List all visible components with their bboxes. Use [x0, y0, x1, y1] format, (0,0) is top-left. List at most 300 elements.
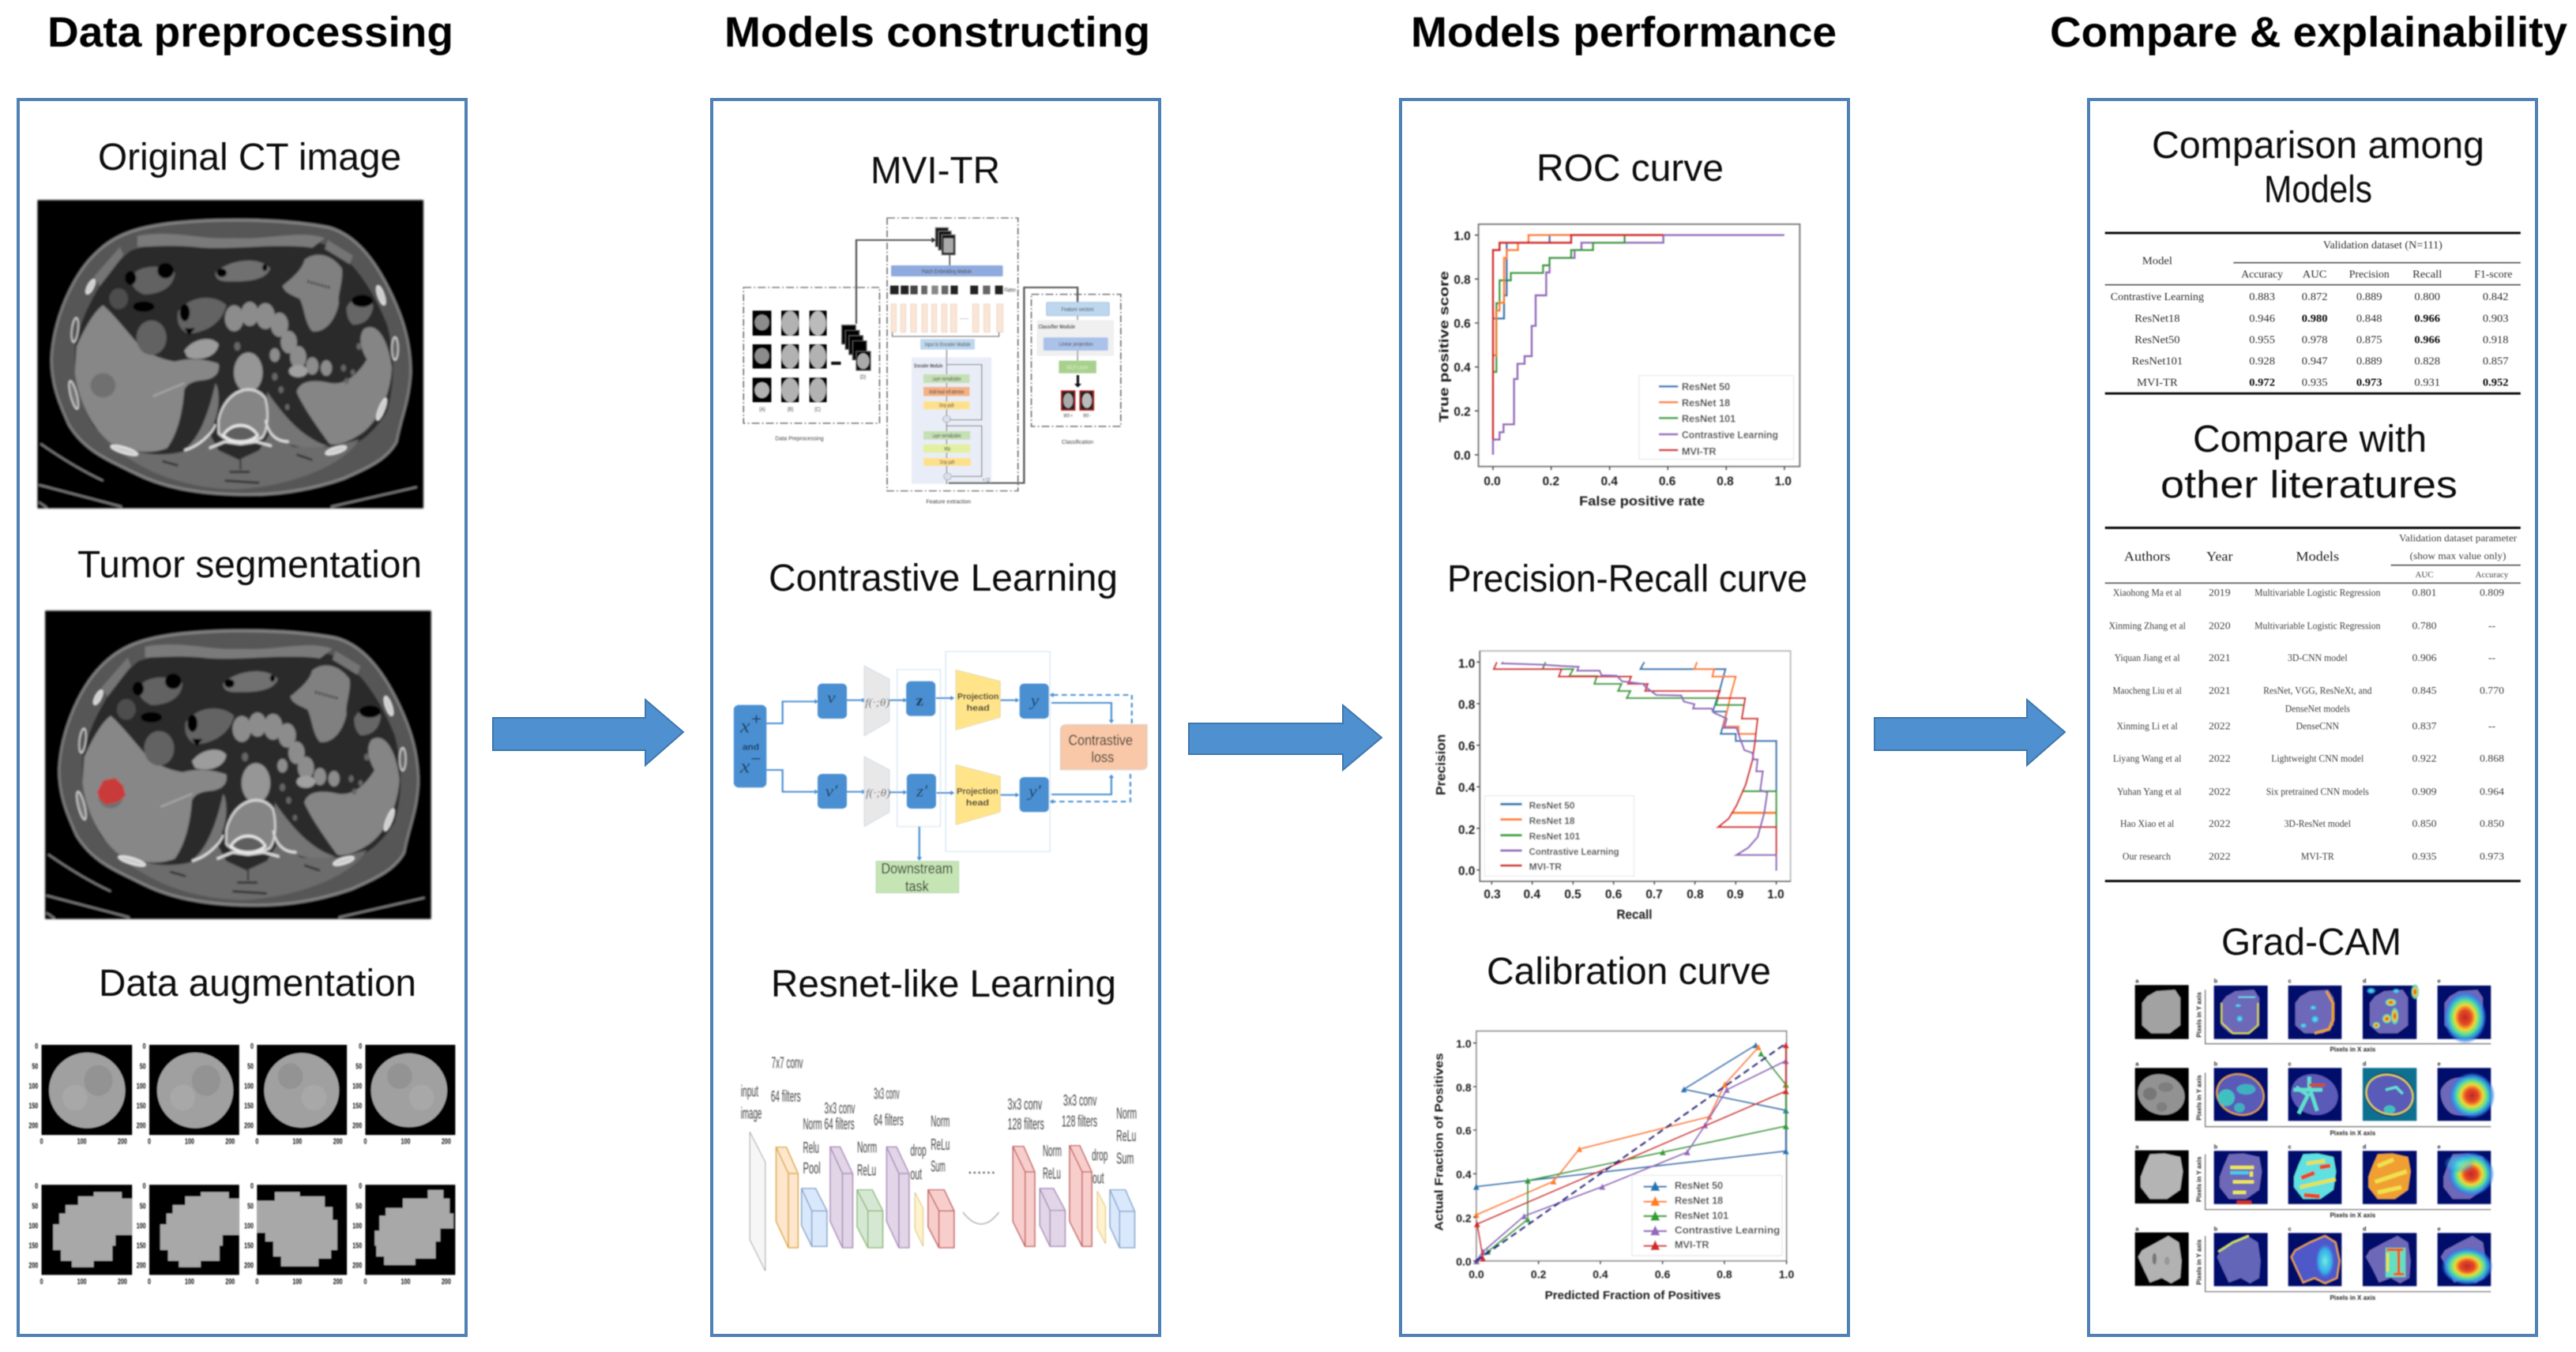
subheading: comparison among models: Models: [2264, 169, 2372, 211]
table: comparison with literature: (show max value only): [2410, 550, 2506, 561]
image grid: augmented tumor crops: 200: [28, 1121, 38, 1130]
image grid: augmented tumor crops: 200: [352, 1261, 362, 1270]
table: comparison with literature: Multivariable Logistic Regression: [2254, 620, 2381, 631]
table: comparison with literature: Multivariable Logistic Regression: [2254, 587, 2381, 599]
tile letters: c: [2288, 1061, 2292, 1068]
chart: calibration curve: Actual Fraction of Positives: [1434, 1053, 1446, 1231]
diagram: resnet-like network: 64 filters: [771, 1088, 801, 1106]
image grid: augmented tumor crops: 200: [28, 1261, 38, 1270]
table: comparison with literature: DenseNet models: [2285, 703, 2350, 714]
axes and axis labels: Pixels in X axis: [2330, 1294, 2376, 1301]
chart: ROC curve: 0.4: [1601, 475, 1618, 489]
diagram: contrastive learning: Projection: [957, 691, 998, 701]
chart: ROC curve: MVI-TR: [1682, 446, 1717, 457]
table: comparison among models: 0.978: [2302, 335, 2328, 346]
table: comparison among models: Validation dataset (N=111): [2323, 240, 2442, 251]
table: comparison with literature: 0.801: [2412, 587, 2437, 599]
chart: precision-recall curve: ResNet 101: [1529, 831, 1581, 842]
diagram: MVI-TR architecture: (B): [788, 406, 794, 412]
arrow: performance to comparison: [1875, 700, 2065, 765]
table: comparison with literature: 0.845: [2412, 685, 2437, 697]
image: original CT scan: [37, 200, 423, 509]
table: comparison with literature: 0.780: [2412, 620, 2437, 631]
chart: ROC curve: ResNet 101: [1682, 414, 1736, 425]
diagram: contrastive learning: z: [916, 691, 923, 709]
table: comparison with literature: ResNet, VGG, ResNeXt, and: [2263, 685, 2372, 697]
heading: data preprocessing: Data preprocessing: [47, 9, 453, 56]
chart: calibration curve: 0.2: [1531, 1268, 1547, 1280]
table: comparison among models: 0.980: [2302, 314, 2328, 325]
chart: calibration curve: ResNet 50: [1675, 1181, 1723, 1192]
diagram: resnet-like network: drop: [1092, 1147, 1107, 1164]
tile letters: d: [2363, 1225, 2366, 1232]
image grid: augmented tumor crops: 0: [148, 1277, 151, 1286]
table: comparison with literature: 3D-CNN model: [2288, 652, 2348, 663]
subheading: calibration curve: Calibration curve: [1487, 951, 1771, 993]
chart: calibration curve: 0.8: [1717, 1268, 1732, 1280]
chart: precision-recall curve: 0.2: [1458, 824, 1475, 837]
axes and axis labels: Pixels in X axis: [2330, 1129, 2376, 1136]
tile letters: b: [2214, 978, 2218, 985]
chart: calibration curve: [1434, 1031, 1795, 1302]
diagram: resnet-like network: 3x3 conv: [1008, 1096, 1042, 1114]
table: comparison among models: AUC: [2303, 269, 2326, 280]
image grid: augmented tumor crops: 200: [244, 1121, 254, 1130]
table: comparison among models: ResNet18: [2134, 314, 2180, 325]
axes and axis labels: Pixels in X axis: [2330, 1046, 2376, 1053]
table: comparison among models: 0.889: [2356, 356, 2382, 367]
tile letters: a: [2135, 978, 2139, 985]
subheading: MVI-TR: MVI-TR: [871, 150, 1000, 192]
diagram: resnet-like network: Norm: [931, 1114, 950, 1130]
subheading: comparison among models: [2152, 125, 2484, 211]
panel: models constructing: Norm: [1116, 1106, 1137, 1122]
table: comparison with literature: Six pretrained CNN models: [2266, 786, 2369, 797]
image grid: augmented tumor crops: 100: [352, 1081, 362, 1091]
subheading: compare with other literatures: [2160, 419, 2458, 506]
diagram: MVI-TR architecture: Data Preprocessing: [775, 435, 824, 441]
table: comparison among models: 0.935: [2302, 377, 2328, 389]
image grid: augmented tumor crops: 200: [137, 1121, 146, 1130]
diagram: resnet-like network: Relu: [803, 1140, 819, 1157]
diagram: contrastive learning: x: [739, 755, 750, 777]
table: comparison among models: 0.828: [2414, 356, 2440, 367]
diagram: contrastive learning: f(·;θ): [866, 787, 890, 799]
tile letters: [2135, 978, 2441, 1232]
diagram: MVI-TR architecture: Drop path: [939, 402, 954, 408]
image grid: augmented tumor crops: 150: [28, 1101, 38, 1110]
diagram: MVI-TR architecture: Mlp: [944, 445, 950, 452]
diagram: resnet-like network: Sum: [931, 1158, 946, 1175]
table: comparison with literature: 3D-ResNet model: [2285, 817, 2351, 829]
diagram: contrastive learning: task: [905, 878, 929, 895]
chart: ROC curve: 0.2: [1453, 405, 1471, 419]
diagram: resnet-like network: 64 filters: [825, 1116, 855, 1133]
table: comparison among models: 0.842: [2483, 291, 2509, 303]
image grid: augmented tumor crops: 200: [333, 1277, 343, 1286]
table: comparison among models: Model: [2142, 256, 2172, 267]
image grid: augmented tumor crops: 150: [244, 1241, 254, 1250]
chart: ROC curve: False positive rate: [1579, 494, 1705, 509]
chart: precision-recall curve: 0.8: [1687, 888, 1704, 902]
tile letters: b: [2214, 1225, 2218, 1232]
diagram: MVI-TR architecture: (A): [759, 406, 765, 412]
diagram: resnet-like network: 64 filters: [874, 1112, 904, 1129]
table: comparison with literature: Xiaohong Ma et al: [2113, 587, 2182, 599]
image grid: augmented tumor crops: 200: [244, 1261, 254, 1270]
image grid: augmented tumor crops: 100: [137, 1222, 146, 1230]
chart: precision-recall curve: 0.4: [1458, 782, 1476, 795]
subheading: ROC curve: ROC curve: [1536, 148, 1724, 190]
image grid: augmented tumor crops: 50: [355, 1061, 362, 1071]
table: comparison with literature: 0.850: [2480, 817, 2504, 829]
tile letters: e: [2438, 1225, 2441, 1232]
table: comparison with literature: 0.837: [2412, 720, 2437, 732]
table: comparison among models: ResNet101: [2132, 356, 2183, 367]
diagram: resnet-like network: out: [910, 1166, 922, 1183]
axes and axis labels: Pixels in X axis: [2330, 1211, 2376, 1219]
chart: ROC curve: 0.0: [1484, 475, 1501, 489]
diagram: contrastive learning: Contrastive: [1069, 732, 1133, 749]
image grid: augmented tumor crops: 0: [40, 1136, 43, 1146]
table: comparison with literature: Maocheng Liu et al: [2113, 685, 2182, 697]
subheading: comparison among models: Comparison among: [2152, 125, 2484, 167]
diagram: resnet-like network: Pool: [803, 1160, 821, 1177]
diagram: contrastive learning: v′: [825, 781, 838, 800]
panel: data preprocessing: [18, 100, 466, 1335]
table: comparison among models: 0.931: [2414, 377, 2440, 389]
tile letters: a: [2135, 1061, 2139, 1068]
image grid: augmented tumor crops: 50: [32, 1061, 38, 1071]
table: comparison with literature: --: [2488, 652, 2495, 663]
panel: compare and explainability: [2089, 100, 2537, 1335]
image grid: augmented tumor crops: 0: [359, 1042, 362, 1050]
diagram: MVI-TR architecture: (D): [860, 374, 866, 380]
table: comparison with literature: 2022: [2209, 753, 2231, 764]
image grid: augmented tumor crops: 50: [140, 1061, 146, 1071]
table: comparison among models: 0.952: [2483, 377, 2509, 389]
diagram: contrastive learning: and: [743, 743, 759, 752]
panel border: [2089, 100, 2537, 1335]
image grid: augmented tumor crops: 200: [118, 1136, 127, 1146]
diagram: contrastive learning: y: [1029, 690, 1039, 709]
table: comparison among models: 0.973: [2356, 377, 2382, 389]
image grid: augmented tumor crops: 100: [28, 1081, 38, 1091]
table: comparison among models: Contrastive Learning: [2111, 291, 2204, 303]
tile letters: d: [2363, 978, 2366, 985]
image grid: augmented tumor crops: 100: [137, 1081, 146, 1091]
table: comparison with literature: 2020: [2209, 620, 2231, 631]
table: comparison among models: 0.946: [2249, 314, 2275, 325]
image grid: augmented tumor crops: 50: [32, 1202, 38, 1211]
chart: ROC curve: 0.8: [1453, 273, 1471, 287]
image grid: augmented tumor crops: 200: [118, 1277, 127, 1286]
image grid: augmented tumor crops: 100: [185, 1277, 194, 1286]
table: comparison among models: 0.918: [2483, 335, 2509, 346]
image grid: augmented tumor crops: 100: [292, 1136, 302, 1146]
image grid: augmented tumor crops: 100: [244, 1081, 254, 1091]
tile letters: d: [2363, 1061, 2366, 1068]
diagram: MVI-TR architecture: Patch Embedding Module: [922, 268, 972, 275]
table: comparison with literature: AUC: [2416, 571, 2434, 580]
tile letters: e: [2438, 1143, 2441, 1150]
figure: Grad-CAM heatmaps: [2133, 978, 2495, 1301]
image grid: augmented tumor crops: 0: [35, 1042, 38, 1050]
diagram: resnet-like network: ......: [968, 1164, 995, 1177]
image grid: augmented tumor crops: 0: [35, 1181, 38, 1190]
diagram: MVI-TR architecture: Layer normalization: [932, 375, 961, 382]
diagram: contrastive learning: v: [827, 688, 836, 707]
diagram: contrastive learning: +: [751, 711, 762, 728]
table: comparison among models: 0.875: [2356, 335, 2382, 346]
image grid: augmented tumor crops: 50: [140, 1202, 146, 1211]
diagram: MVI-TR architecture: .....: [960, 314, 968, 321]
table: comparison among models: F1-score: [2474, 269, 2512, 280]
image grid: augmented tumor crops: 100: [244, 1222, 254, 1230]
panel: models constructing: [712, 100, 1160, 1335]
tile letters: e: [2438, 978, 2441, 985]
tile letters: e: [2438, 1061, 2441, 1068]
image grid: augmented tumor crops: [28, 1042, 455, 1286]
diagram: contrastive learning: head: [966, 798, 989, 808]
subheading: contrastive learning: Contrastive Learning: [769, 558, 1118, 599]
arrow: models to performance: [1189, 705, 1382, 770]
chart: ROC curve: 0.0: [1453, 449, 1471, 463]
diagram: MVI-TR architecture: Multi-head self-attention: [929, 389, 964, 395]
chart: calibration curve: Contrastive Learning: [1675, 1225, 1780, 1236]
table: comparison with literature: 0.922: [2412, 753, 2437, 764]
tile letters: c: [2288, 1225, 2292, 1232]
diagram: resnet-like network: 7x7 conv: [772, 1055, 803, 1072]
chart: ROC curve: Contrastive Learning: [1682, 430, 1778, 441]
table: comparison with literature: 2019: [2209, 587, 2231, 599]
table: comparison among models: 0.857: [2483, 356, 2509, 367]
image grid: augmented tumor crops: 0: [364, 1277, 367, 1286]
table: comparison with literature: Lightweight CNN model: [2271, 753, 2364, 764]
table: comparison with literature: 0.770: [2480, 685, 2504, 697]
diagram: MVI-TR architecture: [743, 218, 1121, 505]
panel border: [1401, 100, 1848, 1335]
diagram: contrastive learning: x: [739, 715, 750, 737]
chart: precision-recall curve: 0.0: [1458, 865, 1475, 878]
table: comparison among models: 0.947: [2302, 356, 2328, 367]
chart: calibration curve: MVI-TR: [1675, 1240, 1709, 1251]
subheading: tumor segmentation: Tumor segmentation: [77, 544, 422, 586]
image grid: augmented tumor crops: 100: [28, 1222, 38, 1230]
subheading: original CT image: Original CT image: [98, 137, 401, 178]
diagram: MVI-TR architecture: Feature vectors: [1061, 306, 1094, 313]
table: comparison among models: Accuracy: [2241, 269, 2283, 280]
chart: ROC curve: [1436, 224, 1799, 509]
table: comparison among models: 0.903: [2483, 314, 2509, 325]
panel: models constructing: ReLu: [1116, 1128, 1136, 1145]
diagram: resnet-like network: 128 filters: [1062, 1114, 1097, 1130]
chart: precision-recall curve: 0.6: [1458, 740, 1475, 753]
diagram: resnet-like network: 3x3 conv: [825, 1100, 856, 1117]
heading: compare and explainability: Compare & explainability: [2050, 9, 2567, 56]
table: comparison with literature: 0.809: [2480, 587, 2504, 599]
image grid: augmented tumor crops: 200: [333, 1136, 343, 1146]
table: comparison among models: 0.966: [2414, 335, 2440, 346]
chart: precision-recall curve: 0.3: [1484, 888, 1501, 902]
table: comparison with literature: 2022: [2209, 817, 2231, 829]
table: comparison with literature: Xinming Li et al: [2117, 720, 2178, 732]
diagram: MVI-TR architecture: Feature extraction: [926, 498, 971, 505]
image grid: augmented tumor crops: 0: [40, 1277, 43, 1286]
diagram: MVI-TR architecture: Flatten: [1005, 287, 1016, 293]
diagram: MVI-TR architecture: Layer normalization: [932, 432, 961, 439]
diagram: MVI-TR architecture: MVI -: [1083, 412, 1091, 419]
table: comparison with literature: Year: [2206, 549, 2233, 564]
table: comparison with literature: 0.906: [2412, 652, 2437, 663]
table: comparison among models: Recall: [2412, 269, 2442, 280]
image grid: augmented tumor crops: 150: [28, 1241, 38, 1250]
chart: precision-recall curve: 0.4: [1524, 888, 1540, 902]
row 4 tiles: [2135, 1233, 2493, 1286]
chart: ROC curve: 0.4: [1453, 362, 1471, 375]
diagram: contrastive learning: Projection: [957, 786, 998, 796]
diagram: resnet-like network: 128 filters: [1008, 1116, 1044, 1133]
chart: calibration curve: 0.4: [1456, 1168, 1472, 1181]
table: comparison among models: 0.966: [2414, 314, 2440, 325]
axes and axis labels: Pixels in Y axis: [2196, 1239, 2203, 1285]
axes and axis labels: Pixels in Y axis: [2196, 992, 2203, 1038]
chart: calibration curve: 0.6: [1456, 1125, 1472, 1137]
table: comparison among models: 0.972: [2249, 377, 2275, 389]
axes and axis labels: Pixels in Y axis: [2196, 1075, 2203, 1121]
table: comparison with literature: [2105, 528, 2521, 881]
diagram: contrastive learning: loss: [1091, 749, 1114, 766]
table: comparison with literature: 2021: [2209, 685, 2231, 697]
diagram: contrastive learning: −: [750, 750, 761, 768]
image grid: augmented tumor crops: 200: [137, 1261, 146, 1270]
image grid: augmented tumor crops: 0: [143, 1042, 146, 1050]
image grid: augmented tumor crops: 200: [352, 1121, 362, 1130]
diagram: resnet-like network: ReLu: [857, 1162, 876, 1179]
image grid: augmented tumor crops: 0: [148, 1136, 151, 1146]
table: comparison with literature: 2022: [2209, 786, 2231, 797]
subheading: Grad-CAM: Grad-CAM: [2221, 922, 2401, 963]
image grid: augmented tumor crops: 0: [250, 1042, 254, 1050]
table: comparison among models: 0.955: [2249, 335, 2275, 346]
panel border: [712, 100, 1160, 1335]
image grid: augmented tumor crops: 100: [77, 1277, 87, 1286]
table: comparison with literature: 0.973: [2480, 851, 2504, 862]
subheading: compare with other literatures: Compare with: [2193, 419, 2427, 460]
table: comparison with literature: 0.935: [2412, 851, 2437, 862]
image grid: augmented tumor crops: 50: [247, 1202, 254, 1211]
diagram: MVI-TR architecture: Classifier Module: [1038, 323, 1075, 330]
chart: calibration curve: 0.8: [1456, 1081, 1472, 1094]
table: comparison with literature: Liyang Wang et al: [2113, 753, 2182, 764]
image grid: augmented tumor crops: 50: [355, 1202, 362, 1211]
table: comparison among models: [2105, 233, 2521, 393]
tile letters: b: [2214, 1061, 2218, 1068]
diagram: resnet-like network: out: [1092, 1170, 1104, 1187]
chart: ROC curve: 0.6: [1659, 475, 1675, 489]
row 3 tiles: [2135, 1151, 2495, 1204]
table: comparison with literature: Hao Xiao et al: [2120, 817, 2175, 829]
diagram: resnet-like network: input: [741, 1083, 758, 1100]
image grid: augmented tumor crops: 150: [244, 1101, 254, 1110]
chart: calibration curve: 0.0: [1469, 1268, 1484, 1280]
table: comparison with literature: Yuhan Yang et al: [2117, 786, 2182, 797]
diagram: resnet-like network: 3x3 conv: [1063, 1092, 1097, 1110]
chart: precision-recall curve: 0.7: [1645, 888, 1663, 902]
image grid: augmented tumor crops: 0: [250, 1181, 254, 1190]
chart: ROC curve: ResNet 50: [1682, 381, 1730, 392]
chart: calibration curve: ResNet 18: [1675, 1196, 1723, 1207]
image grid: augmented tumor crops: 0: [255, 1277, 259, 1286]
tile letters: b: [2214, 1143, 2218, 1150]
table: comparison with literature: 0.850: [2412, 817, 2437, 829]
image grid: augmented tumor crops: 100: [185, 1136, 194, 1146]
diagram: MVI-TR architecture: × 12: [983, 476, 990, 483]
diagram: resnet-like network: Norm: [803, 1116, 822, 1133]
table: comparison with literature: Validation dataset parameter: [2399, 532, 2518, 543]
tile letters: a: [2135, 1143, 2139, 1150]
chart: calibration curve: ResNet 101: [1675, 1210, 1728, 1221]
subheading: data augmentation: Data augmentation: [99, 963, 416, 1005]
chart: ROC curve: ResNet 18: [1682, 397, 1730, 408]
tile letters: a: [2135, 1225, 2139, 1232]
table: comparison among models: MVI-TR: [2137, 377, 2178, 389]
table: comparison among models: 0.928: [2249, 356, 2275, 367]
chart: ROC curve: 1.0: [1775, 475, 1792, 489]
image grid: augmented tumor crops: 0: [255, 1136, 259, 1146]
table: comparison with literature: Authors: [2124, 549, 2171, 564]
heading: models constructing: Models constructing: [724, 9, 1150, 56]
diagram: MVI-TR architecture: Input to Encoder Module: [924, 341, 971, 347]
diagram: contrastive learning: z′: [916, 781, 928, 800]
table: comparison with literature: --: [2488, 720, 2495, 732]
table: comparison among models: 0.848: [2356, 314, 2382, 325]
subheading: compare with other literatures: other literatures: [2160, 464, 2458, 506]
image grid: augmented tumor crops: 100: [401, 1277, 411, 1286]
axes and axis labels: [2196, 990, 2491, 1301]
table: comparison with literature: 0.868: [2480, 753, 2504, 764]
image grid: augmented tumor crops: 200: [442, 1277, 451, 1286]
table: comparison with literature: Xinming Zhang et al: [2108, 620, 2186, 631]
diagram: MVI-TR architecture: Linear projection: [1059, 340, 1093, 347]
table: comparison among models: 0.800: [2414, 291, 2440, 303]
chart: ROC curve: 0.6: [1453, 317, 1471, 331]
image grid: augmented tumor crops: 150: [137, 1101, 146, 1110]
chart: precision-recall curve: Precision: [1433, 734, 1448, 795]
table: comparison with literature: 2021: [2209, 652, 2231, 663]
tile letters: c: [2288, 1143, 2292, 1150]
diagram: resnet-like network: drop: [910, 1142, 927, 1159]
chart: calibration curve: 1.0: [1779, 1268, 1795, 1280]
heading: models performance: Models performance: [1411, 9, 1837, 56]
arrow: preprocessing to models: [493, 700, 683, 765]
chart: calibration curve: 0.4: [1593, 1268, 1608, 1280]
diagram: contrastive learning: [734, 652, 1147, 895]
panel border: [18, 100, 466, 1335]
image grid: augmented tumor crops: 200: [225, 1277, 235, 1286]
table: comparison with literature: Accuracy: [2476, 571, 2509, 580]
table: comparison among models: 0.883: [2249, 291, 2275, 303]
chart: ROC curve: True positive score: [1436, 271, 1451, 422]
diagram: contrastive learning: f(·;θ): [865, 697, 890, 709]
chart: ROC curve: 0.8: [1717, 475, 1734, 489]
diagram: MVI-TR architecture: Classification: [1062, 438, 1093, 445]
diagram: contrastive learning: head: [967, 703, 990, 713]
image grid: augmented tumor crops: 100: [352, 1222, 362, 1230]
chart: precision-recall curve: 0.6: [1605, 888, 1622, 902]
image grid: augmented tumor crops: 50: [247, 1061, 254, 1071]
chart: precision-recall curve: Recall: [1616, 907, 1652, 922]
